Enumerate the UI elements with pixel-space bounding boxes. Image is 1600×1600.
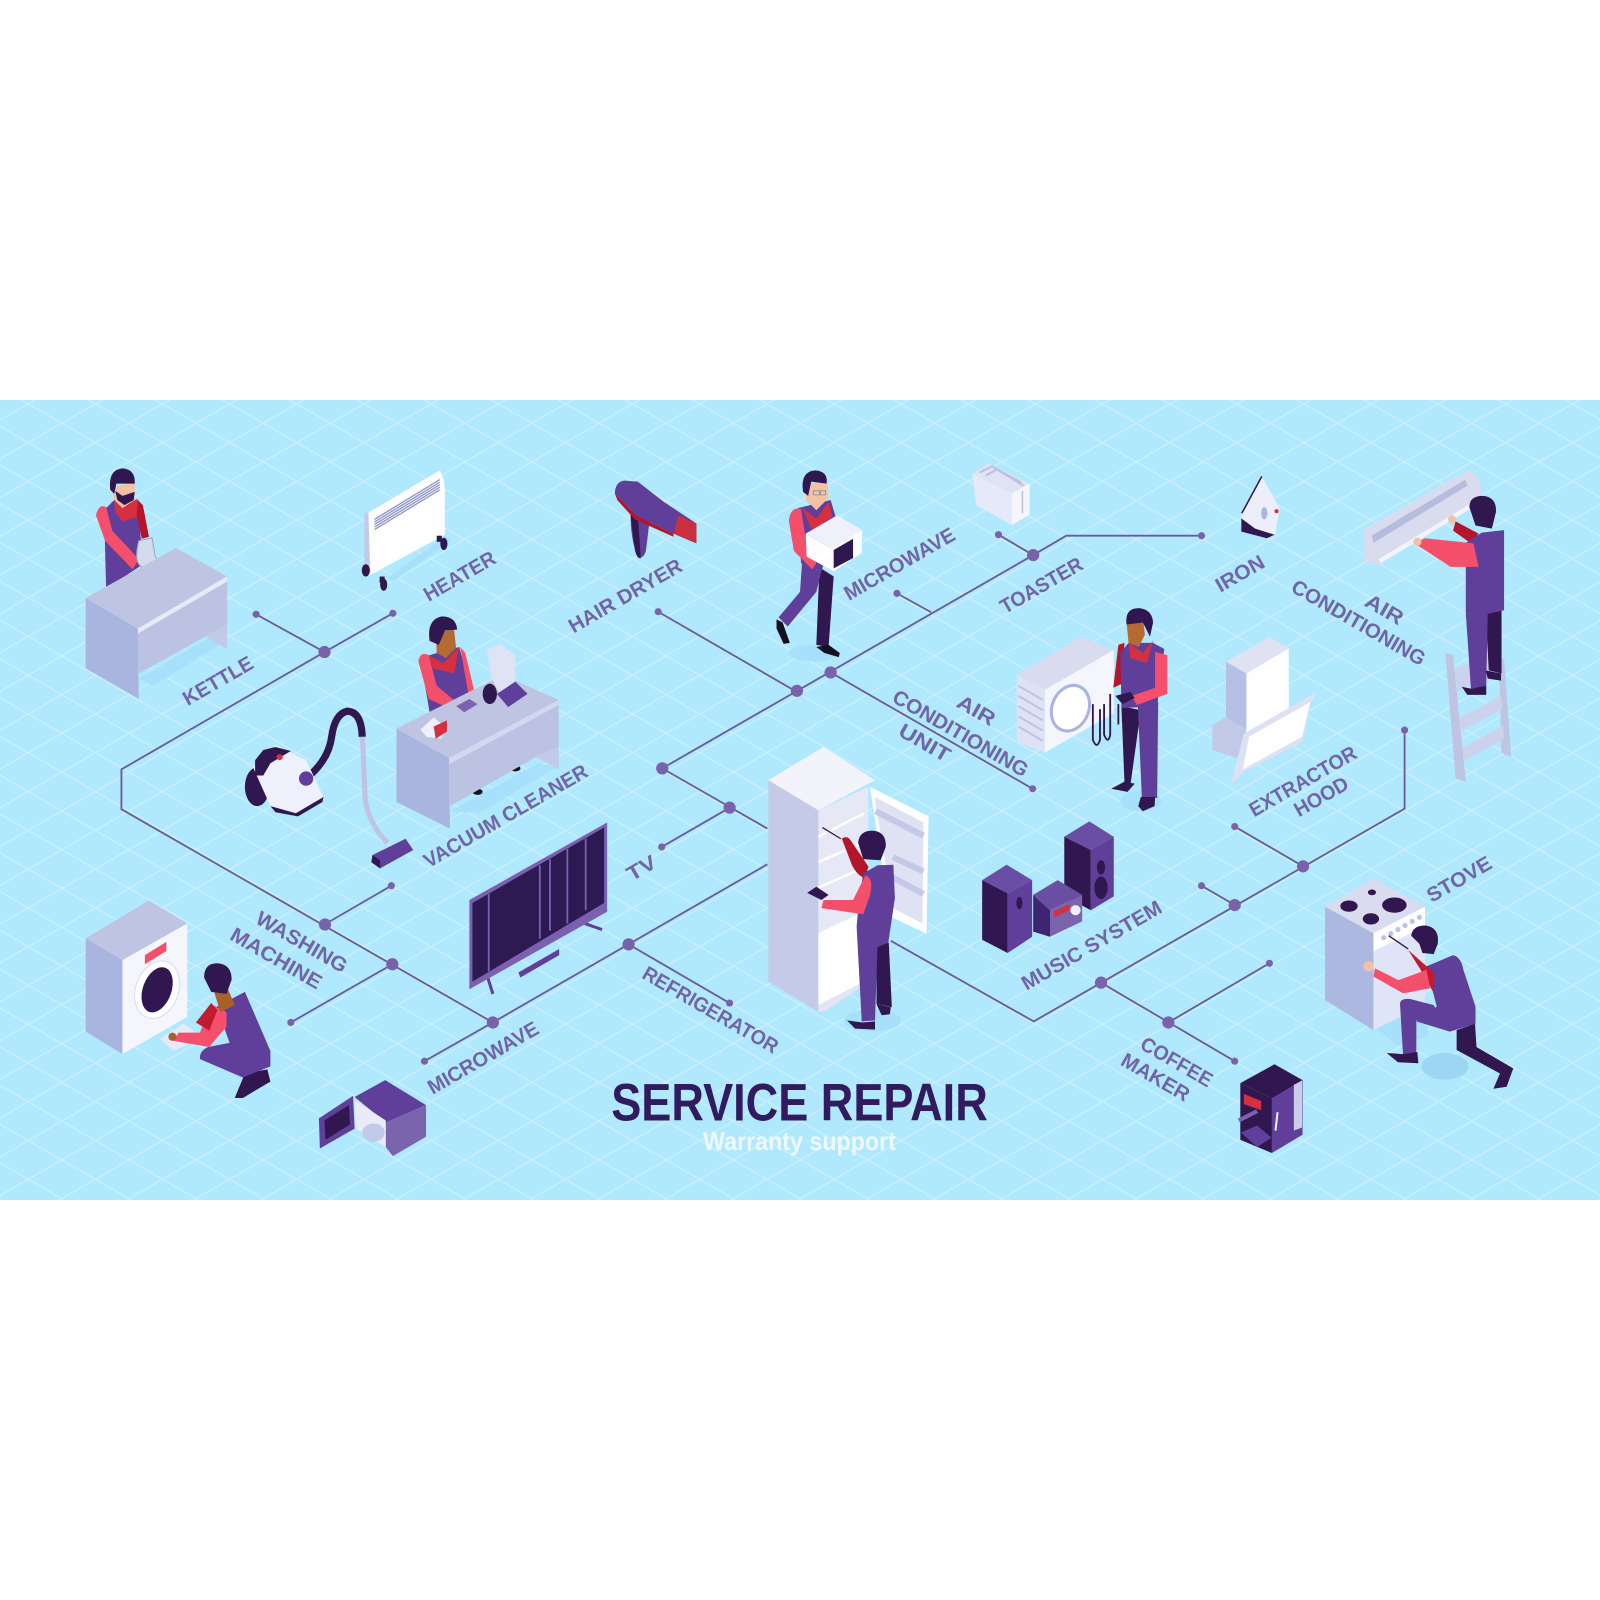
torso	[798, 500, 837, 571]
shoes	[847, 1020, 875, 1030]
red arm	[1408, 950, 1435, 993]
heater body	[364, 470, 445, 576]
shoes	[1462, 686, 1486, 695]
face	[1127, 617, 1145, 647]
label: washing machine	[226, 908, 351, 994]
label: coffee maker: COFFEE	[1136, 1033, 1216, 1092]
front leg	[1400, 999, 1450, 1055]
back leg	[816, 567, 834, 647]
hair	[429, 616, 457, 645]
label: toaster: TOASTER	[997, 554, 1087, 619]
front leg	[857, 927, 878, 1021]
figure: technician installing air conditioner on ladder	[1364, 471, 1511, 782]
interior	[355, 1100, 386, 1147]
label: air conditioning unit: CONDITIONING	[888, 686, 1032, 782]
blender	[487, 644, 515, 696]
icon: television	[469, 822, 607, 994]
arm	[789, 509, 816, 569]
tube	[362, 733, 388, 843]
torso	[420, 647, 472, 712]
arm	[821, 876, 871, 914]
shoe	[1387, 1052, 1418, 1063]
torso	[1416, 955, 1476, 1032]
back leg	[1457, 1023, 1513, 1089]
paper tray	[160, 1023, 202, 1051]
figure: technician at refrigerator	[768, 747, 929, 1032]
label: extractor hood: EXTRACTOR	[1246, 742, 1361, 822]
shadow	[1421, 1053, 1468, 1080]
left speaker	[982, 865, 1032, 893]
knobs	[1381, 915, 1422, 940]
label: kettle: KETTLE	[179, 653, 257, 710]
arm	[1132, 652, 1167, 705]
phone	[807, 887, 829, 900]
red sleeve	[1113, 643, 1124, 688]
wheel	[245, 767, 269, 806]
shirt	[429, 647, 459, 673]
arm right	[460, 647, 474, 694]
label: hair dryer: HAIR DRYER	[565, 555, 687, 638]
burners	[1340, 889, 1407, 924]
figure: technician repairing stove	[1325, 879, 1513, 1089]
handle	[631, 515, 650, 557]
wheels	[362, 536, 447, 591]
right side	[386, 1105, 426, 1156]
label: music system: MUSIC SYSTEM	[1018, 897, 1166, 995]
beard	[115, 491, 135, 505]
right speaker	[1064, 821, 1114, 850]
screen	[472, 828, 604, 982]
turntable	[362, 1123, 385, 1142]
screwdriver	[822, 828, 841, 839]
lower door	[818, 913, 860, 1005]
hair	[1126, 608, 1153, 637]
figure: technician with air conditioning unit	[1093, 608, 1167, 811]
torso	[857, 865, 895, 947]
fridge side	[768, 780, 818, 1012]
legs	[1486, 610, 1502, 673]
label: tv: TV	[623, 851, 661, 886]
background band with isometric grid	[0, 400, 1600, 1200]
ladder	[1445, 653, 1466, 782]
table edge	[138, 577, 227, 634]
stove panel	[1373, 907, 1425, 952]
shirt collar	[114, 499, 139, 521]
stove top	[1325, 879, 1425, 933]
figure: technician repairing washing machine	[86, 901, 270, 1098]
face	[436, 630, 456, 658]
icon: outdoor air conditioning unit	[1017, 637, 1114, 753]
icon: extractor hood	[1212, 637, 1317, 784]
label: iron: IRON	[1212, 552, 1269, 597]
shirt	[1129, 641, 1153, 663]
shoes	[1111, 782, 1135, 792]
icon: heater	[362, 470, 451, 591]
icon: music system	[982, 821, 1114, 953]
oven	[1373, 927, 1425, 1030]
label: air conditioning: CONDITIONING	[1287, 576, 1429, 671]
dark leg	[877, 943, 892, 1007]
nozzle	[371, 839, 413, 868]
dark sleeve	[196, 1003, 217, 1031]
feet under table	[472, 789, 483, 795]
subtitle: Warranty support	[703, 1128, 896, 1156]
hose	[306, 711, 362, 779]
icon: toaster	[972, 463, 1030, 525]
door	[870, 787, 929, 934]
label: coffee maker: MAKER	[1117, 1050, 1194, 1107]
glasses	[813, 491, 826, 495]
calculator	[456, 699, 478, 712]
icon: hair dryer	[615, 481, 696, 558]
icon: vacuum cleaner	[245, 711, 413, 868]
figure: technician repairing kettle at table	[86, 468, 227, 699]
dark leg	[1121, 706, 1141, 784]
label: extractor hood: HOOD	[1290, 773, 1353, 822]
torso	[1466, 530, 1504, 614]
body	[615, 481, 696, 543]
neck	[212, 986, 235, 1012]
label: heater: HEATER	[420, 547, 500, 606]
face	[805, 482, 829, 510]
label: vacuum cleaner: VACUUM CLEANER	[420, 761, 592, 873]
nozzle	[673, 515, 696, 543]
red arm	[842, 837, 868, 879]
frame	[469, 822, 607, 989]
table top	[396, 675, 559, 758]
hair	[110, 468, 135, 494]
legs and torso	[200, 992, 270, 1078]
stands	[488, 923, 602, 994]
machine front	[122, 923, 187, 1054]
display	[145, 942, 166, 964]
left arm	[96, 506, 139, 569]
slats	[374, 480, 440, 530]
microwave	[806, 515, 862, 549]
hair	[204, 963, 232, 994]
table top	[86, 548, 227, 629]
table side	[86, 598, 139, 699]
title: SERVICE REPAIR	[611, 1073, 988, 1132]
arm	[173, 1004, 227, 1047]
machine side	[86, 938, 122, 1054]
indoor unit	[1364, 471, 1481, 565]
shoes	[777, 619, 790, 644]
bottom bar	[518, 949, 559, 978]
icon: coffee maker	[1239, 1064, 1303, 1153]
amplifier	[1033, 880, 1082, 910]
arm left	[418, 654, 455, 709]
label: coffee maker	[1117, 1033, 1216, 1107]
hair	[858, 831, 886, 860]
label: air conditioning unit: AIR	[953, 691, 999, 731]
label: stove: STOVE	[1423, 853, 1496, 907]
icon: open microwave	[319, 1080, 426, 1156]
top	[355, 1080, 426, 1122]
arm	[1373, 968, 1430, 993]
hand	[1363, 961, 1373, 971]
table front	[449, 705, 559, 806]
drum door	[136, 963, 179, 1017]
label: refrigerator: REFRIGERATOR	[638, 963, 782, 1059]
arm	[1415, 538, 1479, 567]
front leg	[1138, 702, 1158, 798]
drum ring	[127, 955, 187, 1025]
screen stripes	[489, 839, 586, 971]
heater side	[364, 512, 370, 574]
hair	[803, 470, 827, 496]
stove side	[1325, 907, 1373, 1030]
label: microwave upper: MICROWAVE	[840, 524, 959, 605]
table leg	[205, 624, 227, 649]
hands	[1413, 538, 1421, 546]
figure: technician at desk with vacuum	[396, 616, 559, 829]
label: air conditioning: AIR	[1361, 590, 1407, 630]
fridge interior	[818, 787, 868, 933]
hand	[168, 1033, 177, 1041]
label: air conditioning unit: UNIT	[894, 720, 955, 767]
body	[253, 745, 323, 813]
right sleeve	[137, 500, 149, 539]
face	[112, 482, 135, 508]
torso	[1120, 643, 1164, 708]
hair	[1411, 926, 1438, 954]
screwdriver	[1389, 936, 1408, 949]
door	[319, 1096, 355, 1148]
shoes	[235, 1069, 270, 1098]
network nodes	[253, 531, 1408, 1065]
shirt	[802, 502, 833, 531]
table side	[396, 729, 450, 829]
paper roll with red tag	[420, 717, 447, 739]
cables	[1093, 694, 1118, 745]
overalls	[104, 500, 142, 589]
machine top	[86, 901, 187, 960]
icon: iron	[1241, 477, 1280, 538]
figure: technician carrying microwave	[777, 470, 862, 661]
fridge top	[768, 747, 875, 810]
hair	[1469, 496, 1496, 529]
table front	[138, 582, 227, 673]
kettle	[137, 538, 159, 568]
label: washing machine: WASHING	[252, 908, 351, 978]
label: microwave lower: MICROWAVE	[424, 1018, 543, 1099]
front leg	[779, 563, 821, 627]
device	[1115, 692, 1135, 704]
dark arm	[1453, 521, 1479, 543]
flowchart network lines	[121, 535, 1405, 1061]
label: washing machine: MACHINE	[226, 924, 325, 994]
